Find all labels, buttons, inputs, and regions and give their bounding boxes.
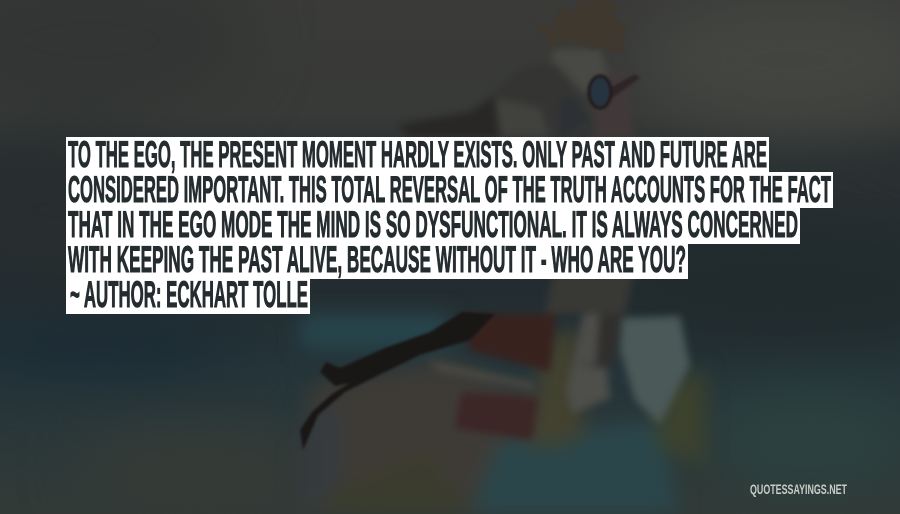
bag bbox=[620, 316, 690, 424]
text strips: white backing bbox=[66, 137, 833, 314]
boy spiky hair bbox=[530, 0, 628, 55]
icon: headphones bbox=[589, 74, 640, 108]
hand bbox=[566, 364, 610, 414]
quote text bbox=[68, 134, 831, 280]
illustration: couple bbox=[300, 0, 705, 514]
girl hair bbox=[494, 64, 574, 137]
watermark: QUOTESSAYINGS.NET bbox=[750, 481, 847, 497]
text: ~ AUTHOR: ECKHART TOLLE bbox=[70, 274, 308, 315]
boy face bbox=[552, 48, 608, 95]
belt strap bbox=[300, 312, 495, 450]
boy neck and collar bbox=[590, 65, 635, 137]
boy torso and leg bbox=[545, 137, 650, 314]
girl skirt bbox=[462, 314, 556, 372]
girl face and hand bbox=[495, 98, 550, 137]
